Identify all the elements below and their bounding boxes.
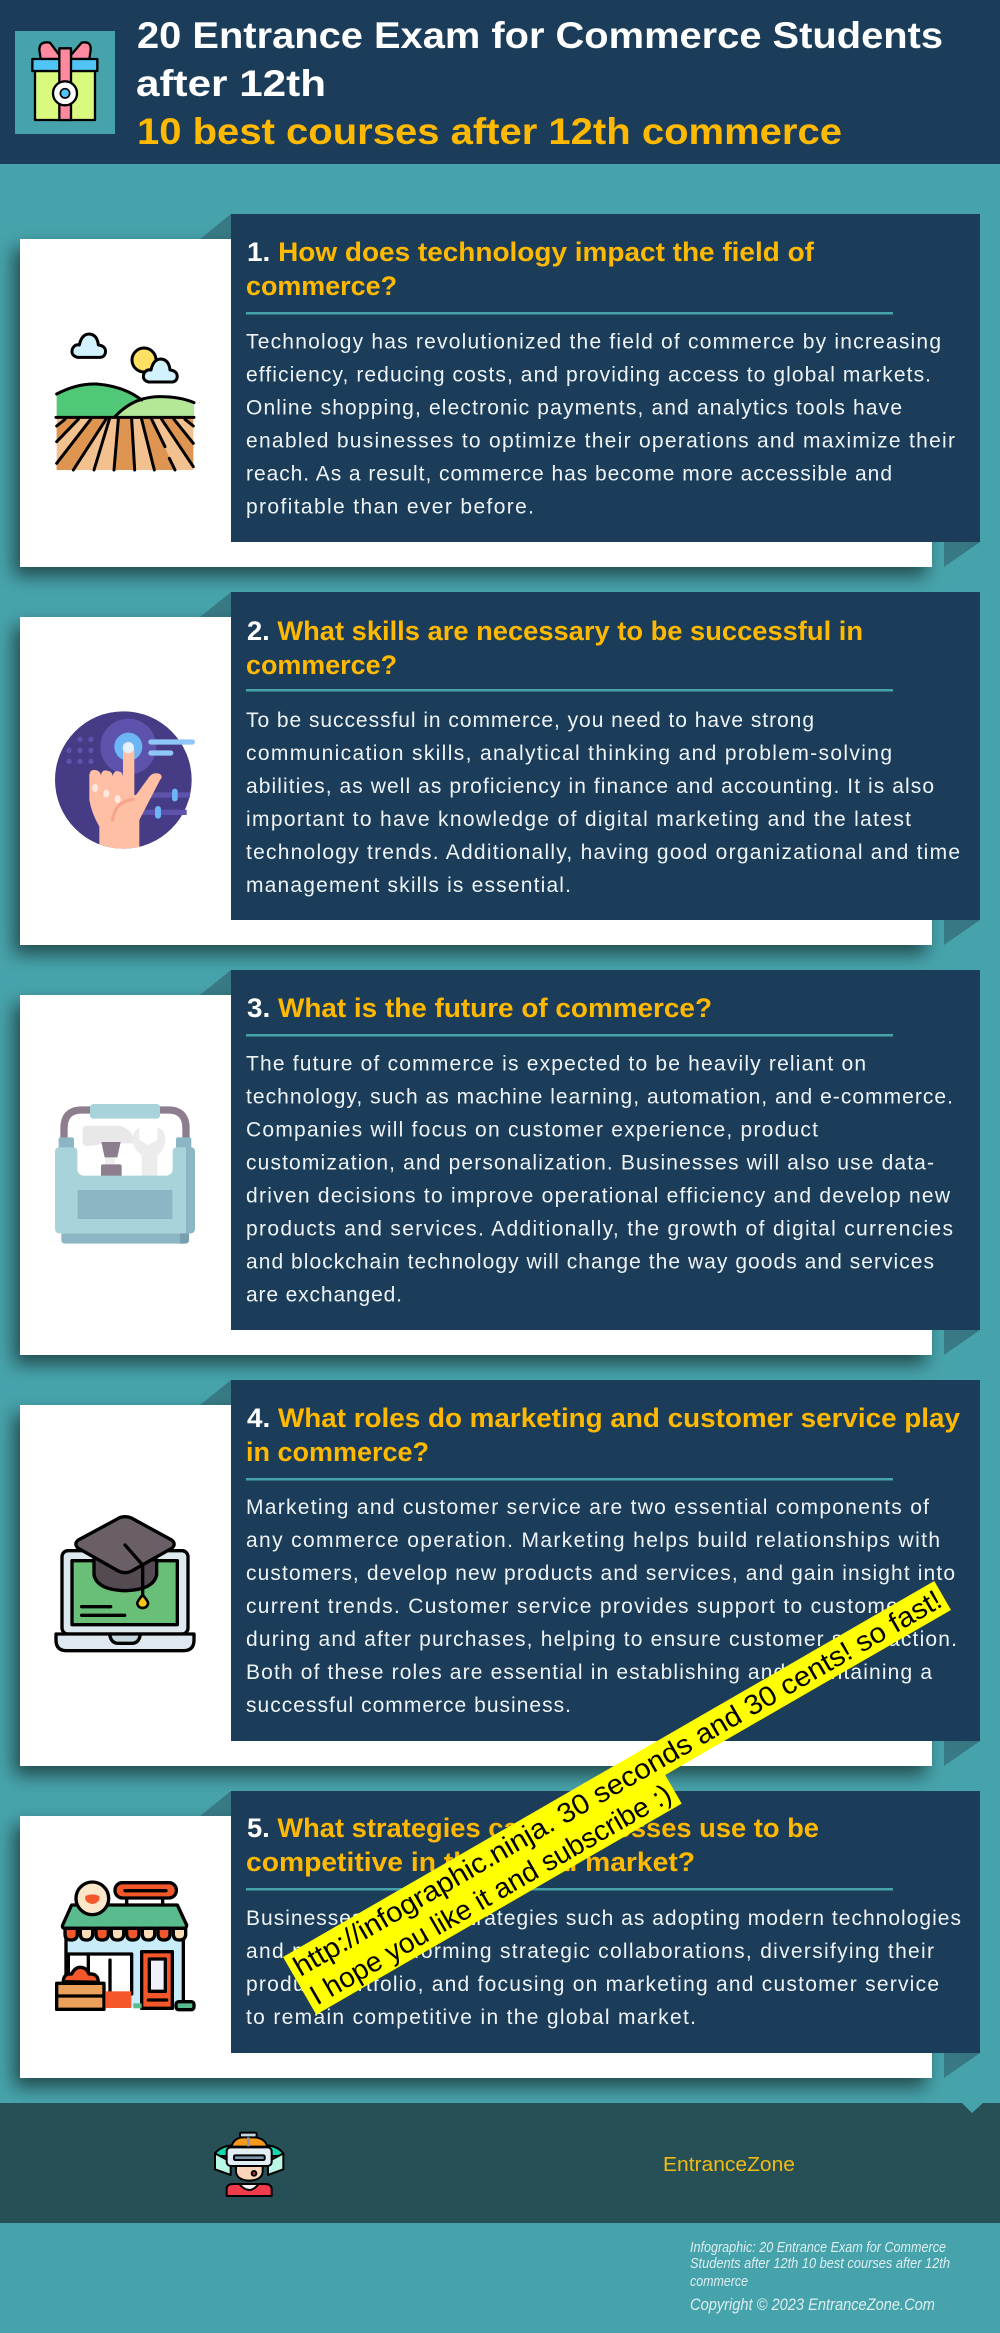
yellow diagonal banner: http://infographic.ninja. 30 seconds and 30 cents! so fast! xyxy=(288,1584,947,1982)
body text: customers, develop new products and services, and gain insight into xyxy=(246,1562,955,1585)
panel: question 5: competitive in the global market? xyxy=(246,1847,695,1877)
body text: Online shopping, electronic payments, and analytics tools have xyxy=(246,396,902,420)
title xyxy=(136,15,943,152)
title: after 12th xyxy=(136,63,326,104)
icon: person with VR headset xyxy=(215,2133,283,2196)
body text: technology trends. Additionally, having good organizational and time xyxy=(246,841,960,864)
body text: important to have knowledge of digital marketing and the latest xyxy=(246,808,911,831)
white card xyxy=(20,995,932,1355)
icon: laptop with graduation cap xyxy=(56,1517,194,1651)
body text: and blockchain technology will change the way goods and services xyxy=(246,1250,934,1274)
panel: question 2 xyxy=(20,592,980,945)
fold triangles xyxy=(200,970,980,1355)
icon: gift box xyxy=(15,31,115,134)
footer notch xyxy=(962,2103,983,2113)
icon: toolbox xyxy=(55,1104,195,1244)
body text: efficiency, reducing costs, and providing access to global markets. xyxy=(246,364,931,386)
panel: question 5 xyxy=(20,1791,980,2078)
body text: successful commerce business. xyxy=(246,1694,571,1717)
heading: 3. What is the future of commerce? xyxy=(247,993,712,1023)
body text: driven decisions to improve operational efficiency and develop new xyxy=(246,1184,951,1208)
body text: Both of these roles are essential in establishing and maintaining a xyxy=(246,1661,932,1684)
footer credits: Copyright © 2023 EntranceZone.Com xyxy=(690,2295,935,2314)
footer band xyxy=(0,2103,1000,2223)
heading: 5. What strategies can businesses use to be xyxy=(247,1813,819,1843)
text panel xyxy=(231,214,980,542)
body text: and processes, forming strategic collaborations, diversifying their xyxy=(246,1940,934,1963)
footer credits: Infographic: 20 Entrance Exam for Commerce xyxy=(690,2239,946,2256)
footer credits xyxy=(690,2239,950,2314)
panel: question 2: commerce? xyxy=(246,650,397,680)
white card xyxy=(20,239,932,567)
white card xyxy=(20,617,932,945)
icon: farm field xyxy=(56,334,194,470)
body text: product portfolio, and focusing on marketing and customer service xyxy=(246,1973,939,1996)
heading: 4. What roles do marketing and customer service play xyxy=(247,1403,960,1433)
footer credits: Students after 12th 10 best courses after 12th xyxy=(690,2255,950,2272)
heading: 1. How does technology impact the field of xyxy=(247,237,815,267)
icon: store front xyxy=(57,1882,194,2010)
fold triangles xyxy=(200,214,980,567)
body text: Marketing and customer service are two essential components of xyxy=(246,1496,929,1519)
body text: products and services. Additionally, the growth of digital currencies xyxy=(246,1218,953,1240)
text panel xyxy=(231,970,980,1330)
body text: Businesses can use strategies such as adopting modern technologies xyxy=(246,1907,961,1930)
body text: Companies will focus on customer experience, product xyxy=(246,1118,818,1142)
divider xyxy=(246,1034,893,1036)
body text: enabled businesses to optimize their operations and maximize their xyxy=(246,430,955,452)
body text: current trends. Customer service provides support to customers xyxy=(246,1595,918,1618)
body text: communication skills, analytical thinking and problem-solving xyxy=(246,742,892,765)
body text: To be successful in commerce, you need to have strong xyxy=(246,709,814,732)
divider xyxy=(246,1888,893,1890)
body text: during and after purchases, helping to ensure customer satisfaction. xyxy=(246,1628,957,1651)
yellow diagonal banner: I hope you like it and subscribe :) xyxy=(304,1778,677,2011)
body text: profitable than ever before. xyxy=(246,496,534,518)
body text xyxy=(246,1907,961,2029)
body text: management skills is essential. xyxy=(246,874,571,897)
body text: any commerce operation. Marketing helps build relationships with xyxy=(246,1529,940,1552)
divider xyxy=(246,312,893,314)
fold triangles xyxy=(200,1791,980,2078)
divider xyxy=(246,689,893,692)
text panel xyxy=(231,1380,980,1741)
body text: are exchanged. xyxy=(246,1284,402,1306)
title: 10 best courses after 12th commerce xyxy=(137,111,842,152)
body text xyxy=(246,709,960,897)
body text: abilities, as well as proficiency in finance and accounting. It is also xyxy=(246,775,934,798)
panel: question 4 xyxy=(20,1380,980,1766)
icon: touch hand xyxy=(55,711,195,850)
brand name: EntranceZone xyxy=(663,2154,795,2176)
panel: question 3 xyxy=(20,970,980,1355)
body text: reach. As a result, commerce has become more accessible and xyxy=(246,462,892,486)
fold triangles xyxy=(200,1380,980,1766)
panel: question 1: commerce? xyxy=(246,271,397,301)
fold triangles xyxy=(200,592,980,945)
body text: technology, such as machine learning, automation, and e-commerce. xyxy=(246,1086,953,1108)
body text xyxy=(246,1496,957,1717)
header banner xyxy=(0,0,1000,164)
white card xyxy=(20,1816,932,2078)
text panel xyxy=(231,1791,980,2053)
text panel xyxy=(231,592,980,920)
heading: 2. What skills are necessary to be successful in xyxy=(247,616,863,646)
title: 20 Entrance Exam for Commerce Students xyxy=(137,15,943,56)
divider xyxy=(246,1478,893,1480)
panel: question 1 xyxy=(20,214,980,567)
body text: Technology has revolutionized the field of commerce by increasing xyxy=(246,330,941,354)
body text xyxy=(246,330,955,518)
body text: customization, and personalization. Businesses will also use data- xyxy=(246,1152,934,1174)
white card xyxy=(20,1405,932,1766)
panel: question 4: in commerce? xyxy=(246,1437,429,1467)
body text: The future of commerce is expected to be heavily reliant on xyxy=(246,1052,866,1076)
footer credits: commerce xyxy=(690,2273,748,2290)
body text: to remain competitive in the global market. xyxy=(246,2006,696,2029)
body text xyxy=(246,1052,953,1306)
